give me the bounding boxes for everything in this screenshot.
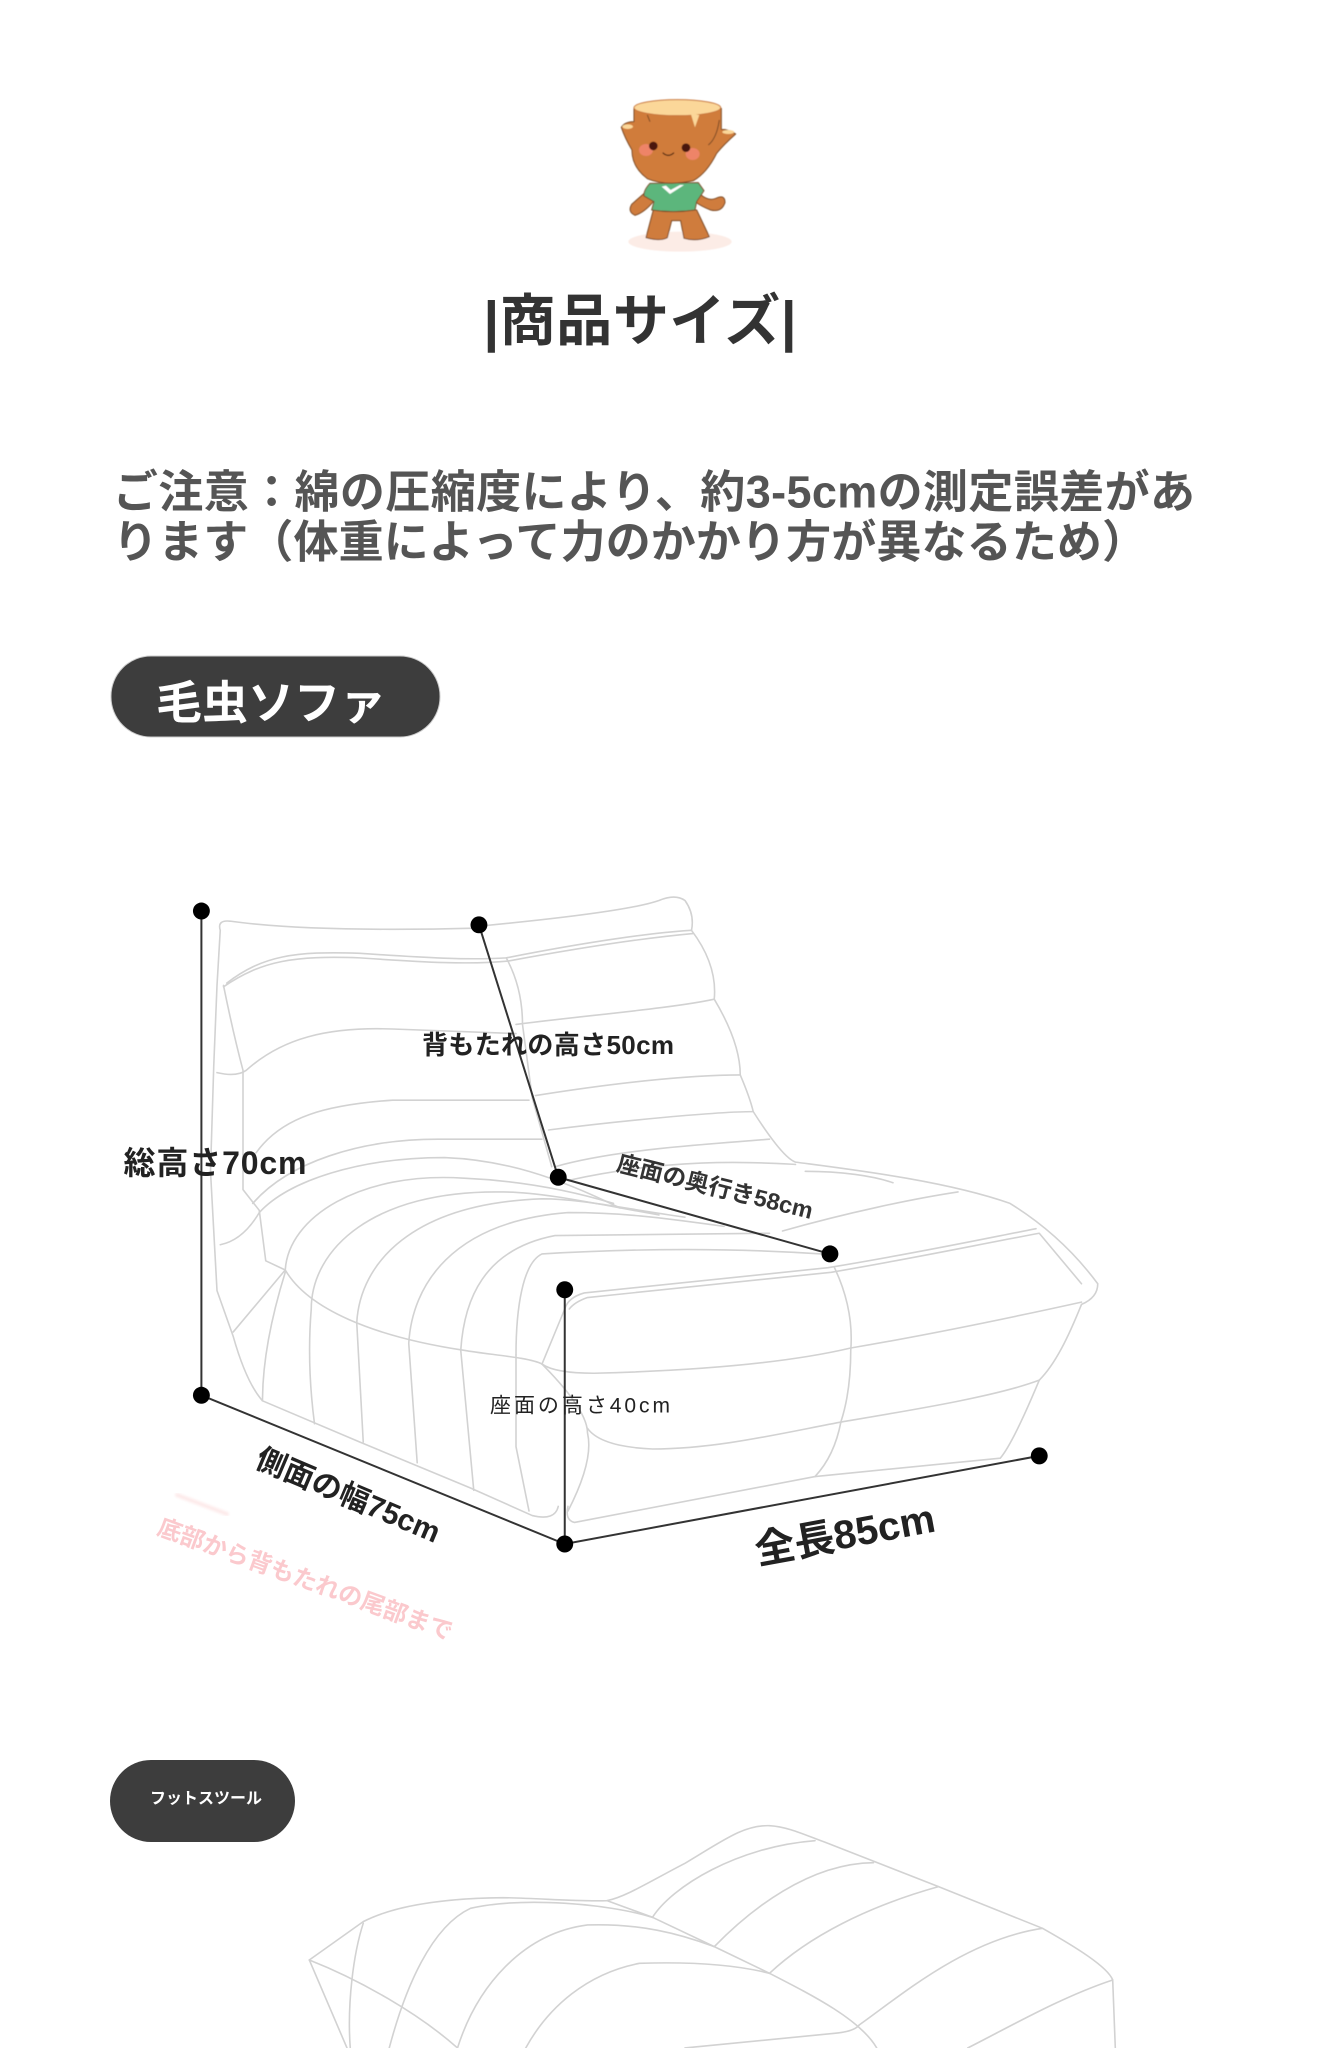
note text: ご注意：綿の圧縮度により、約3-5cmの測定誤差があ — [113, 466, 1195, 518]
label: total height: 総高さ70cm — [124, 1145, 306, 1181]
label: seat depth: 座面の奥行き58cm — [614, 1150, 816, 1224]
icon: tree stump mascot — [621, 100, 736, 252]
heading pill: caterpillar sofa: 毛虫ソファ — [156, 677, 386, 729]
note text — [113, 466, 1195, 568]
pink note: 底部から背もたれの尾部まで — [154, 1514, 456, 1646]
dimension lines — [193, 903, 1048, 1552]
title: |商品サイズ| — [484, 290, 796, 354]
heading pill: footstool: フットスツール — [150, 1790, 262, 1808]
sofa line drawing — [210, 897, 1098, 1522]
label: full length: 全長85cm — [751, 1497, 939, 1573]
label: side width: 側面の幅75cm — [251, 1442, 445, 1550]
label: seat height: 座面の高さ40cm — [490, 1394, 670, 1418]
note text: ります（体重によって力のかかり方が異なるため） — [113, 516, 1147, 568]
label: backrest height: 背もたれの高さ50cm — [422, 1030, 674, 1060]
heading pill: footstool — [110, 1760, 295, 1842]
footstool line drawing — [309, 1826, 1115, 2048]
heading pill: caterpillar sofa — [111, 656, 440, 737]
